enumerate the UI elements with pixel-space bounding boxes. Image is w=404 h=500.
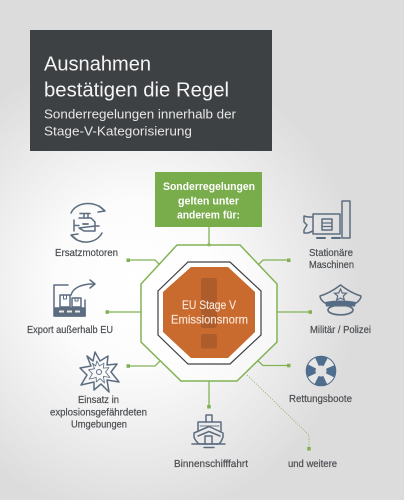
orange stop sign [163,267,255,358]
outer green octagon [141,245,277,381]
label: Binnenschifffahrt: Binnenschifffahrt [174,458,248,470]
icon: stationary machine [304,201,350,238]
label: explosive environments: explosionsgefährdeten [50,406,147,418]
label: explosive environments: Einsatz in [78,394,119,406]
heading: Ausnahmen [44,54,151,76]
green callout: Sonderregelungen [163,181,255,193]
label: explosive environments: Umgebungen [71,418,127,430]
green callout: anderem für: [177,210,240,222]
icon: ship [192,415,225,448]
exclamation mark [201,278,217,348]
heading [44,54,229,102]
label: Rettungsboote: Rettungsboote [289,393,352,405]
label: Export: Export außerhalb EU [27,324,113,336]
subheading: Stage-V-Kategorisierung [44,124,192,138]
label: Ersatzmotoren: Ersatzmotoren [55,247,118,259]
label: Stationäre Maschinen: Stationäre [309,247,353,259]
icon: export [54,280,95,316]
icon: police cap [320,285,361,315]
heading: bestätigen die Regel [44,80,229,102]
label: explosive environments [50,394,147,430]
icon: explosion [80,352,119,392]
subheading [44,106,237,138]
green callout: gelten unter [178,196,240,208]
inner dark octagon [158,262,261,364]
green callout [155,172,262,227]
label: Stationäre Maschinen: Maschinen [309,259,354,271]
sign text [171,298,248,326]
sign text: EU Stage V [182,298,236,312]
subheading: Sonderregelungen innerhalb der [44,106,237,122]
label: und weitere: und weitere [288,458,337,470]
title panel [30,30,272,151]
icon: replacement engine [71,204,105,242]
icon: lifebuoy [306,356,336,386]
label: Stationäre Maschinen [309,247,354,271]
sign text: Emissionsnorm [171,312,248,326]
connector lines [106,227,312,450]
label: Militär / Polizei: Militär / Polizei [310,324,371,336]
